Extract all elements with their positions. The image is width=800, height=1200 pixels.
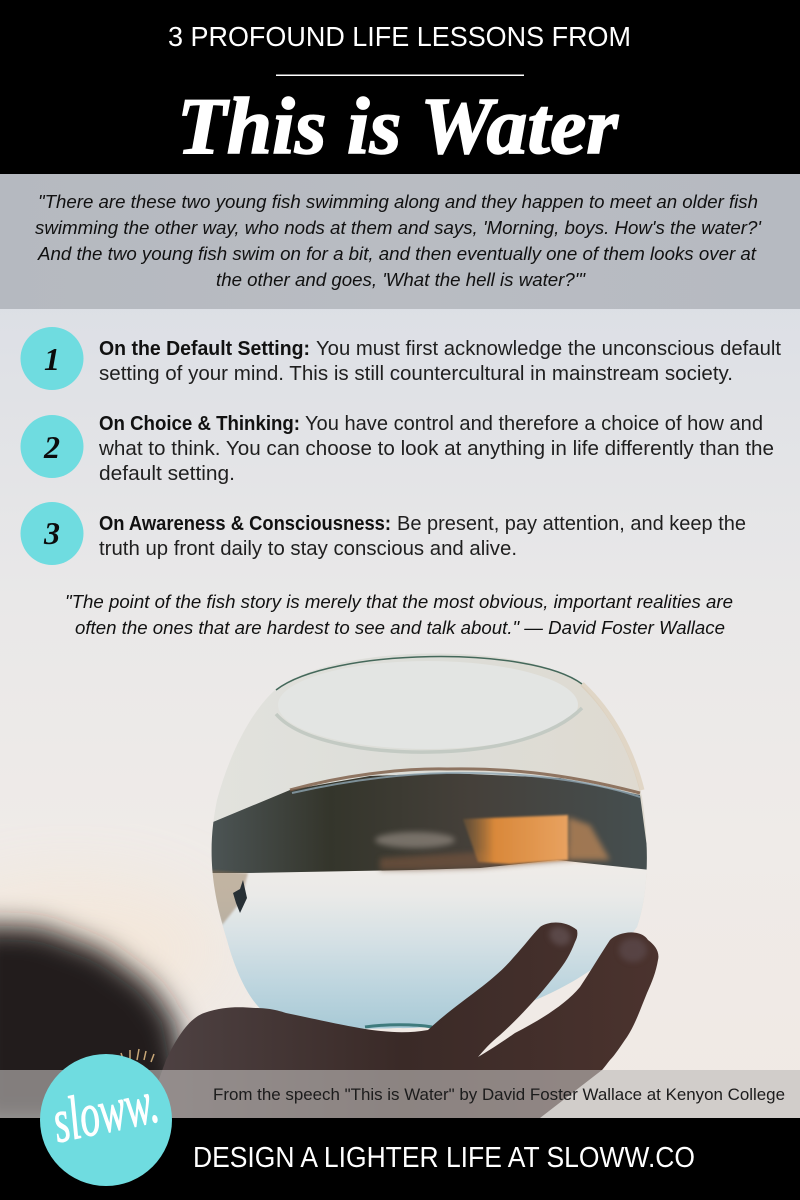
footer panel: DESIGN A LIGHTER LIFE AT SLOWW.CO <box>193 1142 695 1174</box>
sloww logo badge: sloww. <box>46 1068 164 1156</box>
closing quote <box>65 592 733 638</box>
warm brown base of band <box>380 845 570 870</box>
glass fishbowl <box>205 653 650 1035</box>
closing quote: "The point of the fish story is merely that the most obvious, important realities are <box>65 592 733 612</box>
lower clear water <box>205 860 650 1035</box>
number badge 3 <box>20 502 84 565</box>
pale haze in band <box>375 832 455 848</box>
lesson 3: Be present, pay attention, and keep the <box>397 513 746 535</box>
upper glass highlight <box>278 661 578 749</box>
intro quote panel <box>0 174 800 309</box>
main title: This is Water <box>177 83 619 171</box>
lesson 3 <box>20 502 746 565</box>
hand holding bowl <box>145 922 658 1118</box>
header panel <box>0 0 800 174</box>
lesson 3: On Awareness & Consciousness: <box>99 513 391 535</box>
footer panel <box>0 1118 800 1200</box>
lesson 2: what to think. You can choose to look at anything in life differently than the <box>98 438 774 460</box>
first fingertip highlight <box>546 923 574 949</box>
number badge 1 <box>20 327 84 390</box>
lesson 2 <box>20 413 774 485</box>
lesson 2: You have control and therefore a choice of how and <box>305 413 763 435</box>
closing quote: often the ones that are hardest to see and talk about." — David Foster Wallace <box>75 618 725 638</box>
number badge 2 <box>20 415 84 478</box>
bowl body <box>212 653 647 1029</box>
orange sunset glow <box>568 817 610 860</box>
photo background <box>0 174 800 1130</box>
dark reflected water band <box>205 773 650 873</box>
lesson 3: truth up front daily to stay conscious and alive. <box>99 538 517 560</box>
intro quote panel: "There are these two young fish swimming along and they happen to meet an older fish <box>38 192 758 212</box>
sunlit orange patch <box>463 815 568 864</box>
source caption band: From the speech "This is Water" by David Foster Wallace at Kenyon College <box>213 1086 785 1104</box>
blurred dark hill <box>0 925 195 1130</box>
second fingertip highlight <box>619 938 647 962</box>
intro quote panel: swimming the other way, who nods at them and says, 'Morning, boys. How's the water?' <box>35 218 762 238</box>
number badge 1: 1 <box>44 341 60 377</box>
rim and inner lip <box>276 708 582 752</box>
number badge 2: 2 <box>43 429 60 465</box>
blue water surface <box>292 773 640 797</box>
amber left edge of water <box>208 870 248 925</box>
intro quote panel: the other and goes, 'What the hell is water?'" <box>216 270 587 290</box>
sloww logo badge <box>40 1054 172 1186</box>
source caption band <box>0 1070 800 1118</box>
grass fringe <box>114 1049 154 1063</box>
lesson 1: setting of your mind. This is still countercultural in mainstream society. <box>99 363 733 385</box>
subtitle: 3 PROFOUND LIFE LESSONS FROM <box>168 21 631 52</box>
lesson 1 <box>20 327 781 390</box>
lesson 2: On Choice & Thinking: <box>99 413 300 435</box>
brown shoreline <box>290 769 640 793</box>
blurred warm glow behind hill <box>0 880 220 1020</box>
lesson 1: On the Default Setting: <box>99 338 310 360</box>
lesson 1: You must first acknowledge the unconscious default <box>316 338 781 360</box>
lesson 2: default setting. <box>99 463 235 485</box>
tiny dark fish speck <box>233 880 247 913</box>
intro quote panel: And the two young fish swim on for a bit, and then eventually one of them looks over at <box>37 244 757 264</box>
number badge 3: 3 <box>43 515 60 551</box>
